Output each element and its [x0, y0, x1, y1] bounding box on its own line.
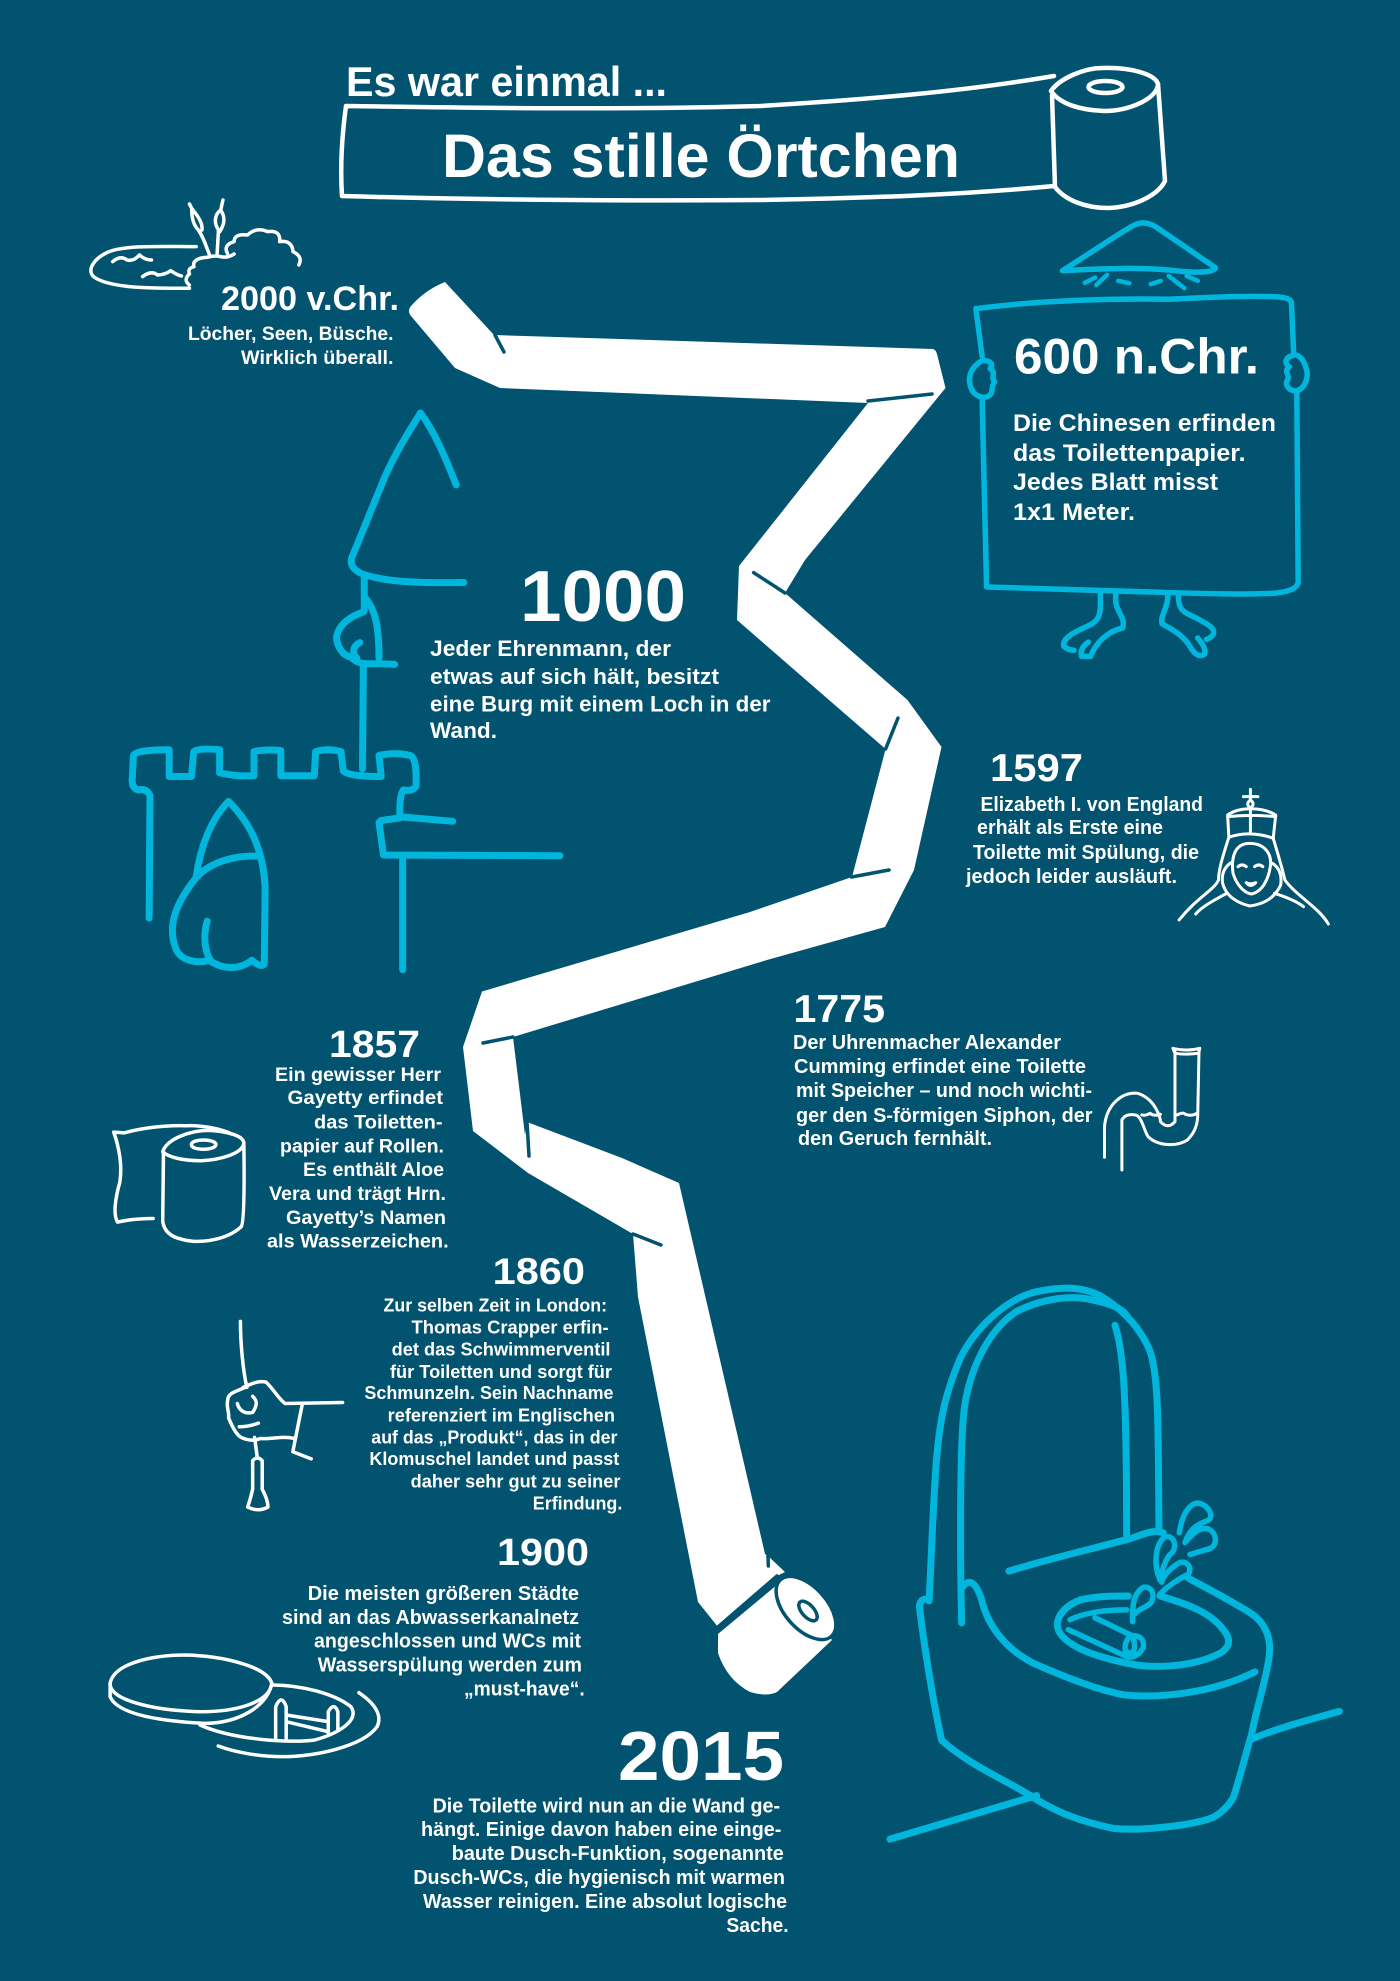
description: sind an das Abwasserkanalnetz [282, 1607, 579, 1629]
panel: 1597 [965, 747, 1328, 924]
description: als Wasserzeichen. [267, 1232, 449, 1252]
description: ger den S-förmigen Siphon, der [796, 1105, 1093, 1127]
paper ribbon timeline [409, 282, 946, 1694]
title: kicker: Es war einmal ... [346, 58, 667, 105]
description: Schmunzeln. Sein Nachname [364, 1383, 614, 1403]
description: Der Uhrenmacher Alexander [793, 1032, 1061, 1054]
icon: toilet paper roll [114, 1126, 244, 1241]
description [430, 636, 771, 743]
year: 1860 [493, 1251, 585, 1292]
year: 1775 [794, 988, 885, 1031]
icon: queen Elizabeth [1179, 789, 1328, 924]
year: 2000 v.Chr. [221, 280, 399, 318]
description: das Toiletten- [314, 1112, 442, 1134]
description: Elizabeth I. von England [980, 794, 1203, 816]
description: Erfindung. [533, 1494, 622, 1514]
panel: 1900 [110, 1532, 589, 1757]
panel: 2000 v.Chr. [91, 200, 399, 369]
description [364, 1295, 622, 1514]
description [965, 794, 1203, 888]
description: Die meisten größeren Städte [308, 1583, 579, 1605]
year: 600 n.Chr. [1014, 328, 1259, 384]
description: etwas auf sich hält, besitzt [430, 664, 720, 689]
description: Toilette mit Spülung, die [973, 842, 1199, 864]
description [793, 1032, 1093, 1150]
description: Thomas Crapper erfin- [412, 1318, 609, 1338]
description: hängt. Einige davon haben eine einge- [421, 1819, 781, 1841]
description: Wand. [430, 718, 497, 743]
year: 2015 [618, 1717, 784, 1795]
description: Ein gewisser Herr [275, 1065, 442, 1086]
description: das Toilettenpapier. [1013, 440, 1246, 467]
description: Es enthält Aloe [303, 1160, 444, 1181]
panel: 2015 [413, 1288, 1339, 1937]
description: auf das „Produkt“, das in der [371, 1428, 617, 1448]
icon: wall-hung shower toilet [890, 1288, 1339, 1839]
icon: pond, reeds and bush [91, 200, 300, 288]
year: 1597 [990, 747, 1083, 790]
description: Die Chinesen erfinden [1013, 410, 1276, 437]
description: papier auf Rollen. [280, 1136, 444, 1158]
description: Cumming erfindet eine Toilette [794, 1056, 1086, 1078]
icon: castle with privy [132, 413, 560, 970]
title: main heading: Das stille Örtchen [442, 122, 960, 190]
description: Vera und trägt Hrn. [269, 1184, 446, 1205]
panel: 1775 [793, 988, 1200, 1170]
description: Sache. [726, 1915, 789, 1937]
description: Gayetty’s Namen [286, 1208, 446, 1229]
description: Wirklich überall. [241, 348, 394, 369]
description: Wasserspülung werden zum [318, 1655, 582, 1677]
year: 1000 [520, 557, 686, 637]
icon: manhole with ladder [110, 1655, 379, 1757]
icon: hand pulling flush chain [227, 1321, 343, 1510]
panel: 1857 [114, 1024, 449, 1252]
description [1013, 410, 1276, 526]
description [188, 324, 394, 369]
description: Jedes Blatt misst [1013, 469, 1218, 496]
description: daher sehr gut zu seiner [411, 1472, 620, 1492]
description: 1x1 Meter. [1013, 499, 1135, 526]
description: Gayetty erfindet [288, 1088, 444, 1109]
description: Die Toilette wird nun an die Wand ge- [433, 1795, 780, 1817]
year: 1900 [497, 1532, 589, 1574]
description: Löcher, Seen, Büsche. [188, 324, 394, 345]
description: Jeder Ehrenmann, der [430, 636, 671, 661]
description [282, 1583, 585, 1701]
description: mit Speicher – und noch wichti- [796, 1080, 1092, 1102]
icon: person with hat holding paper sheet [970, 223, 1307, 656]
description: erhält als Erste eine [977, 817, 1163, 839]
description: angeschlossen und WCs mit [314, 1631, 581, 1653]
description: eine Burg mit einem Loch in der [430, 692, 771, 716]
description: baute Dusch-Funktion, sogenannte [452, 1843, 784, 1865]
description: für Toiletten und sorgt für [390, 1362, 612, 1382]
description [267, 1065, 449, 1252]
panel: 1860 [227, 1251, 622, 1514]
description: Zur selben Zeit in London: [384, 1295, 607, 1315]
description: Wasser reinigen. Eine absolut logische [423, 1891, 787, 1913]
description: den Geruch fernhält. [798, 1128, 992, 1150]
description: jedoch leider ausläuft. [965, 866, 1177, 888]
description: Klomuschel landet und passt [369, 1449, 619, 1469]
description: Dusch-WCs, die hygienisch mit warmen [413, 1867, 785, 1889]
icon: S-shaped siphon [1104, 1048, 1200, 1170]
panel: 1000 [132, 413, 771, 970]
paper roll end [718, 1566, 847, 1694]
description [413, 1795, 789, 1937]
icon: paper roll with banner sheet [341, 68, 1165, 208]
title banner [341, 58, 1165, 208]
description: referenziert im Englischen [388, 1405, 615, 1425]
year: 1857 [329, 1024, 420, 1066]
description: „must-have“. [464, 1679, 585, 1701]
description: det das Schwimmerventil [392, 1339, 610, 1359]
panel: 600 n.Chr. [970, 223, 1307, 656]
